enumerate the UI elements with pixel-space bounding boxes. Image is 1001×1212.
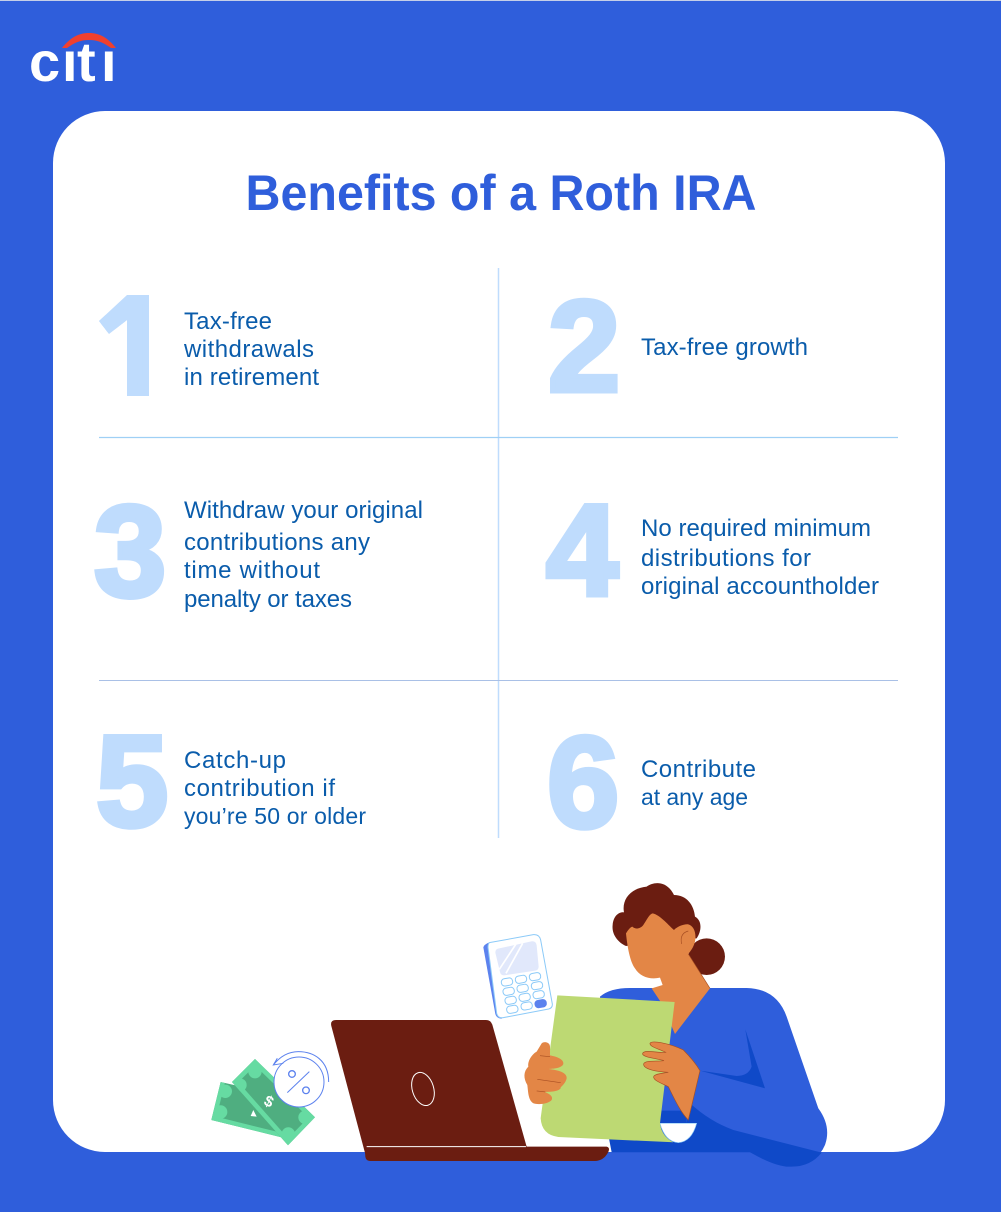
benefit 5: you’re 50 or older <box>184 803 366 829</box>
benefit 2: 2 <box>548 273 620 419</box>
hair bun <box>688 938 725 975</box>
illustration: woman reading document <box>524 883 827 1167</box>
face and neck <box>626 913 710 1034</box>
left hand <box>524 1042 567 1104</box>
logo: citi: citi <box>29 30 117 93</box>
benefit 1: Tax-free <box>184 308 272 335</box>
panel: white card <box>53 111 945 1152</box>
icon: money and percent <box>211 1052 329 1145</box>
icon: money and percent: $ <box>261 1092 276 1112</box>
title: Benefits of a Roth IRA <box>246 165 756 221</box>
benefit 2: Tax-free growth <box>641 334 808 361</box>
right hand <box>643 1042 700 1120</box>
illustration: laptop <box>331 1020 609 1161</box>
benefit 4: 4 <box>546 477 618 623</box>
benefit 4 <box>546 477 879 623</box>
benefit 3: Withdraw your original <box>184 497 423 524</box>
benefit 3: contributions any <box>184 529 370 556</box>
benefit 6: Contribute <box>641 756 756 783</box>
benefit 6 <box>547 709 756 855</box>
benefit 3: penalty or taxes <box>184 586 352 613</box>
benefit 6: at any age <box>641 784 748 810</box>
benefit 1: 1 <box>92 278 164 424</box>
benefit 2 <box>548 273 808 419</box>
benefit 5: Catch-up <box>184 747 286 774</box>
benefit 1 <box>99 295 319 396</box>
document <box>541 995 675 1142</box>
grid dividers <box>99 268 898 838</box>
benefit 4: distributions for <box>641 545 811 572</box>
benefit 1: withdrawals <box>183 336 314 363</box>
sleeve shadow <box>608 1103 822 1167</box>
benefit 3: 3 <box>94 478 166 624</box>
benefit 5: 5 <box>96 708 168 854</box>
illustration: calculator <box>483 935 552 1019</box>
torso <box>600 988 827 1167</box>
benefit 3 <box>94 478 423 624</box>
paper fold <box>660 1123 697 1143</box>
benefit 5 <box>96 708 366 854</box>
benefit 4: original accountholder <box>641 573 879 600</box>
hair <box>613 883 700 946</box>
benefit 4: No required minimum <box>641 515 871 542</box>
benefit 6: 6 <box>547 709 619 855</box>
benefit 5: contribution if <box>184 775 335 802</box>
benefit 1: in retirement <box>184 364 319 391</box>
benefit 3: time without <box>184 557 320 584</box>
